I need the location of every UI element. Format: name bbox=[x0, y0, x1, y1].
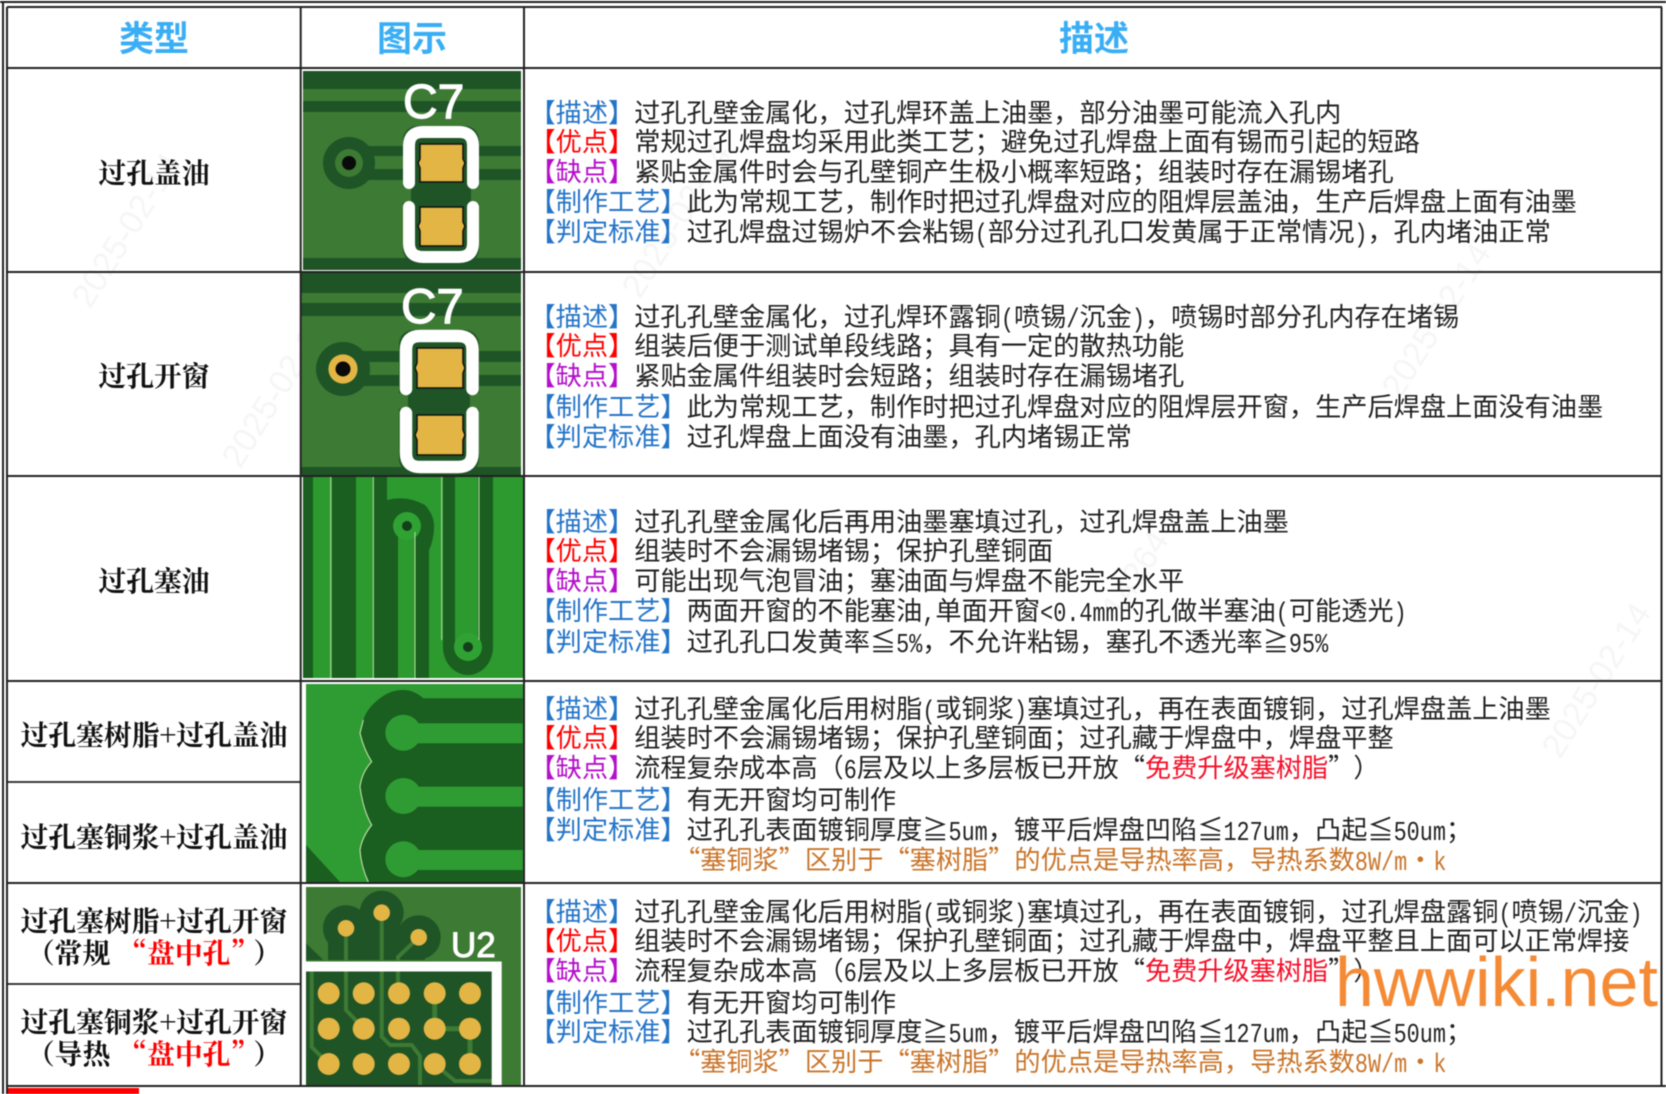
type label: 过孔开窗 bbox=[98, 354, 210, 394]
description text: 8W/m bbox=[1355, 848, 1407, 879]
description text: 5um bbox=[948, 1020, 988, 1051]
description text: 【缺点】紧贴金属件时会与孔壁铜产生极小概率短路；组装时存在漏锡堵孔 bbox=[530, 151, 1394, 189]
panel: row 2 via exposed bbox=[98, 272, 1603, 476]
description text: ) bbox=[1014, 697, 1027, 727]
description text: k bbox=[1433, 848, 1446, 879]
watermark: faint diagonal dates: 2025-02-14 bbox=[1375, 237, 1499, 404]
watermark: faint diagonal dates: 2025-02-14 bbox=[1535, 597, 1659, 764]
description text bbox=[530, 501, 1407, 660]
description text bbox=[530, 891, 1642, 1081]
type label: resin plug: 过孔塞树脂+过孔盖油 bbox=[21, 713, 287, 753]
description text: 【制作工艺】有无开窗均可制作 bbox=[530, 982, 896, 1020]
description text: ( bbox=[922, 697, 935, 727]
panel: row 3 via plugged with ink bbox=[98, 476, 1407, 679]
description text: 【优点】常规过孔焊盘均采用此类工艺；避免过孔焊盘上面有锡而引起的短路 bbox=[530, 121, 1420, 159]
description text: 【制作工艺】此为常规工艺，制作时把过孔焊盘对应的阻焊层开窗，生产后焊盘上面没有油墨 bbox=[530, 386, 1603, 424]
description text: 【缺点】紧贴金属件组装时会短路；组装时存在漏锡堵孔 bbox=[530, 355, 1184, 393]
description text: / bbox=[1066, 305, 1079, 335]
pcb image: ink plugged vias bbox=[302, 476, 524, 679]
panel: row 1 via tented bbox=[98, 70, 1577, 271]
description text: · bbox=[1407, 1041, 1433, 1079]
description text: k bbox=[1433, 1050, 1446, 1081]
description text: 【判定标准】过孔孔口发黄率≦ ，不允许粘锡，塞孔不透光率≧ bbox=[530, 621, 1289, 659]
site watermark: hwwiki.net bbox=[1335, 943, 1658, 1021]
heading: description: 描述 bbox=[1059, 11, 1129, 62]
description text: 【判定标准】过孔孔表面镀铜厚度≧ ，镀平后焊盘凹陷≦ ，凸起≦ ； bbox=[530, 1011, 1472, 1049]
description text: 127um bbox=[1223, 819, 1289, 849]
description text: 6 bbox=[844, 756, 857, 787]
description text: 【制作工艺】此为常规工艺，制作时把过孔焊盘对应的阻焊层盖油，生产后焊盘上面有油墨 bbox=[530, 181, 1577, 219]
description text: 【判定标准】过孔孔表面镀铜厚度≧ ，镀平后焊盘凹陷≦ ，凸起≦ ； bbox=[530, 809, 1472, 847]
type label: resin plug via in pad: 过孔塞树脂+过孔开窗 bbox=[21, 899, 287, 939]
description text: ) bbox=[1629, 900, 1642, 930]
description text: ) bbox=[1394, 599, 1407, 630]
type sublabel: regular via in pad: （常规 “盘中孔” ） bbox=[27, 931, 281, 971]
description text: ) bbox=[1354, 220, 1368, 250]
description text: “塞铜浆”区别于“塞树脂”的优点是导热率高，导热系数 bbox=[674, 839, 1355, 877]
description text: · bbox=[1407, 839, 1433, 877]
description text: “塞铜浆”区别于“塞树脂”的优点是导热率高，导热系数 bbox=[674, 1041, 1355, 1079]
watermark: faint diagonal dates: 2025-02-14 bbox=[615, 137, 739, 304]
description text: / bbox=[1564, 900, 1577, 930]
pcb image: C7 exposed via bbox=[300, 272, 522, 476]
description text: 【描述】过孔孔壁金属化后用树脂 或铜浆 塞填过孔，再在表面镀铜，过孔焊盘盖上油墨 bbox=[530, 688, 1551, 726]
heading: type: 类型 bbox=[119, 11, 189, 62]
panel: row 5 via in pad bbox=[20, 886, 1642, 1086]
pcb image: C7 tented via: C7 bbox=[403, 76, 464, 129]
description text: ( bbox=[1001, 305, 1014, 335]
description text: 【优点】组装时不会漏锡堵锡；保护孔壁铜面；过孔藏于焊盘中，焊盘平整且上面可以正常焊接 bbox=[530, 920, 1629, 958]
heading: illustration: 图示 bbox=[377, 11, 447, 62]
description text: 【描述】过孔孔壁金属化后再用油墨塞填过孔，过孔焊盘盖上油墨 bbox=[530, 501, 1289, 539]
type label: 过孔盖油 bbox=[98, 151, 210, 191]
description text: 【缺点】流程复杂成本高（ 层及以上多层板已开放“免费升级塞树脂” ） bbox=[530, 747, 1380, 785]
description text: 【优点】组装时不会漏锡堵锡；保护孔壁铜面 bbox=[530, 530, 1053, 568]
description text: 【描述】过孔孔壁金属化，过孔焊环露铜 喷锡 沉金 ，喷锡时部分孔内存在堵锡 bbox=[530, 296, 1459, 334]
description text: 【描述】过孔孔壁金属化后用树脂 或铜浆 塞填过孔，再在表面镀铜，过孔焊盘露铜 喷锡 沉金 bbox=[530, 891, 1629, 929]
pcb image: C7 exposed via: C7 bbox=[401, 280, 464, 334]
description text: 8W/m bbox=[1355, 1050, 1407, 1081]
description text: 【缺点】流程复杂成本高（ 层及以上多层板已开放“免费升级塞树脂” ） bbox=[530, 950, 1380, 988]
description text: ) bbox=[1132, 305, 1145, 335]
type label: copper plug: 过孔塞铜浆+过孔盖油 bbox=[21, 815, 287, 855]
description text: 95% bbox=[1289, 630, 1328, 660]
description text: 【优点】组装后便于测试单段线路；具有一定的散热功能 bbox=[530, 325, 1184, 363]
description text: ( bbox=[922, 900, 935, 930]
pcb image: U2 BGA: U2 bbox=[451, 926, 496, 965]
watermark: faint diagonal dates: 14264 bbox=[1095, 524, 1177, 624]
description text: 6 bbox=[844, 959, 857, 990]
header row bbox=[119, 11, 1129, 62]
panel: row 4 resin or copper plug with tenting bbox=[20, 683, 1551, 883]
red bar at bottom left bbox=[8, 1088, 139, 1094]
description text: 【制作工艺】两面开窗的不能塞油 单面开窗 的孔做半塞油 可能透光 bbox=[530, 590, 1394, 628]
description text: ( bbox=[1498, 900, 1512, 930]
type label: copper plug via in pad: 过孔塞铜浆+过孔开窗 bbox=[21, 1000, 287, 1040]
description text: 【制作工艺】有无开窗均可制作 bbox=[530, 779, 896, 817]
type sublabel: thermal via in pad: （导热 “盘中孔” ） bbox=[27, 1032, 281, 1072]
description text bbox=[530, 688, 1551, 879]
description text bbox=[530, 296, 1603, 454]
pcb image: C7 tented via bbox=[302, 70, 522, 271]
description text: ( bbox=[1276, 599, 1289, 630]
description text: , bbox=[922, 599, 935, 630]
description text: 【缺点】可能出现气泡冒油；塞油面与焊盘不能完全水平 bbox=[530, 560, 1184, 598]
description text: ( bbox=[975, 220, 988, 250]
description text: 【判定标准】过孔焊盘过锡炉不会粘锡 部分过孔孔口发黄属于正常情况 ，孔内堵油正常 bbox=[530, 211, 1551, 249]
description text: <0.4mm bbox=[1040, 599, 1119, 630]
description text: 50um bbox=[1394, 819, 1446, 849]
description text: 【优点】组装时不会漏锡堵锡；保护孔壁铜面；过孔藏于焊盘中，焊盘平整 bbox=[530, 717, 1394, 755]
type label: 过孔塞油 bbox=[98, 559, 210, 599]
description text: 127um bbox=[1223, 1020, 1289, 1051]
watermark: faint diagonal dates: 2025-02-14 bbox=[65, 147, 189, 314]
watermark: faint diagonal dates: 2025-02-14 bbox=[215, 307, 339, 474]
description text: 5um bbox=[948, 819, 988, 849]
pcb image: plated traces bbox=[305, 683, 524, 883]
description text: ) bbox=[1014, 900, 1027, 930]
description text bbox=[530, 92, 1577, 250]
description text: 【判定标准】过孔焊盘上面没有油墨，孔内堵锡正常 bbox=[530, 416, 1132, 454]
description text: 50um bbox=[1394, 1020, 1446, 1051]
description text: 【描述】过孔孔壁金属化，过孔焊环盖上油墨，部分油墨可能流入孔内 bbox=[530, 92, 1341, 130]
description text: 5% bbox=[896, 630, 922, 660]
pcb image: U2 BGA bbox=[305, 886, 522, 1086]
